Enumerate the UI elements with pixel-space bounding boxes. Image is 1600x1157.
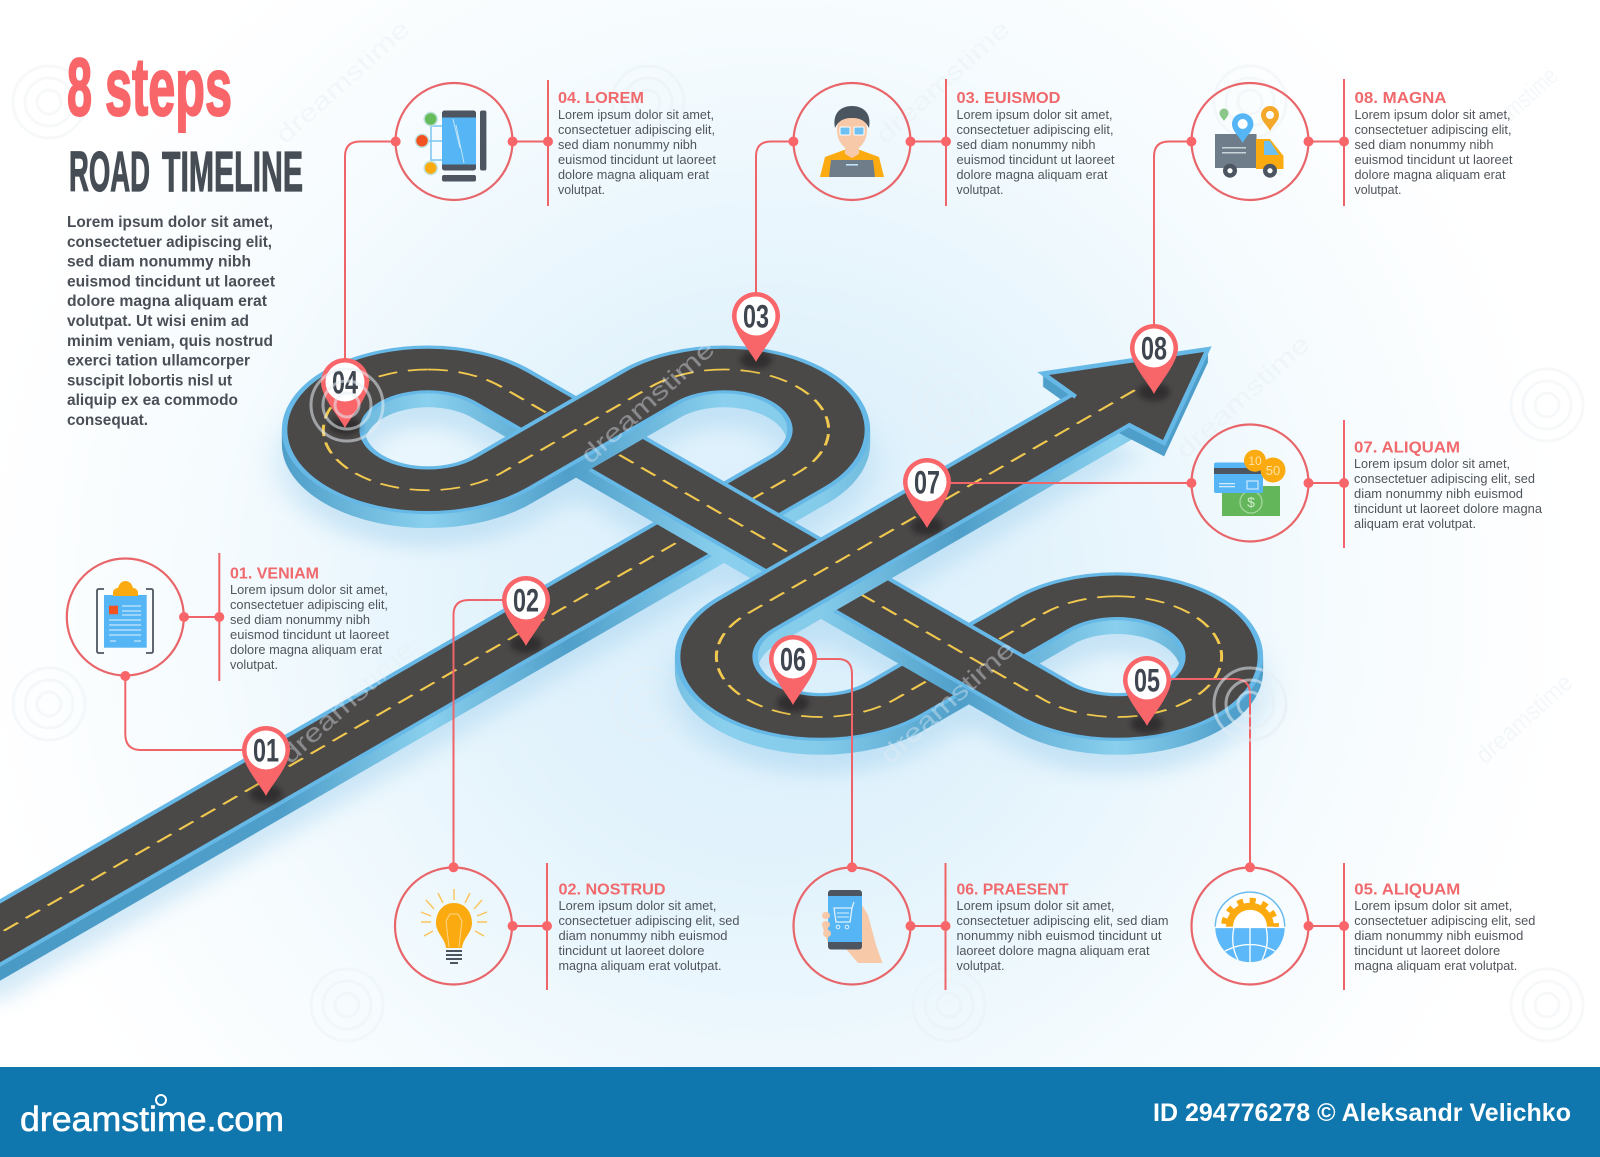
step heading: 04. LOREM	[558, 90, 644, 107]
step heading: 03. EUISMOD	[956, 90, 1060, 107]
pin 01	[242, 726, 290, 803]
step description: sed diam nonummy nibh	[558, 138, 697, 152]
intro paragraph: volutpat. Ut wisi enim ad	[67, 313, 249, 330]
watermark text: dreamstime	[1470, 62, 1563, 149]
step description: consectetuer adipiscing elit,	[1354, 123, 1512, 137]
pin 07	[903, 458, 951, 535]
step heading: 06. PRAESENT	[956, 882, 1069, 899]
callout 03 EUISMOD	[788, 79, 1115, 206]
heading: road timeline: ROAD	[69, 140, 150, 204]
step description: Lorem ipsum dolor sit amet,	[558, 899, 716, 913]
callout 08 MAGNA	[1186, 79, 1513, 206]
title: 8 steps	[67, 42, 232, 133]
step description: Lorem ipsum dolor sit amet,	[956, 899, 1114, 913]
step description	[956, 899, 1168, 973]
step description: sed diam nonummy nibh	[1354, 138, 1494, 152]
connector: pin 02 to callout	[454, 600, 505, 867]
step description: Lorem ipsum dolor sit amet,	[558, 108, 714, 122]
connector: pin 05 to callout	[1170, 679, 1250, 867]
watermark text: dreamstime	[270, 15, 415, 149]
callout 07 ALIQUAM	[1186, 420, 1542, 548]
intro paragraph: Lorem ipsum dolor sit amet,	[67, 214, 273, 231]
step description: euismod tincidunt ut laoreet	[558, 153, 717, 167]
watermark spirals over road	[311, 369, 1286, 740]
step description: tincidunt ut laoreet dolore	[558, 944, 705, 958]
intro paragraph	[67, 214, 276, 429]
pin 01: 01	[253, 732, 279, 768]
footer banner	[0, 1067, 1600, 1157]
step heading: 07. ALIQUAM	[1354, 440, 1460, 456]
pin 02: 02	[513, 582, 539, 618]
callout 06 PRAESENT	[794, 862, 1168, 990]
step description	[558, 899, 740, 973]
watermark text: dreamstime	[575, 335, 720, 469]
connector: pin 03 to callout	[756, 142, 793, 296]
step description: dolore magna aliquam erat	[558, 168, 710, 182]
title: 8 steps: steps	[105, 42, 232, 133]
step description: diam nonummy nibh euismod	[558, 929, 728, 943]
step description: dolore magna aliquam erat	[1354, 168, 1506, 182]
callout 02 NOSTRUD	[395, 862, 740, 990]
pin 08: 08	[1141, 330, 1167, 366]
step description: magna aliquam erat volutpat.	[1354, 959, 1517, 973]
intro paragraph: suscipit lobortis nisl ut	[67, 372, 233, 389]
intro paragraph: euismod tincidunt ut laoreet	[67, 273, 276, 290]
connector: pin 07 to callout	[950, 482, 1191, 484]
intro paragraph: consequat.	[67, 412, 148, 429]
step description: magna aliquam erat volutpat.	[558, 959, 722, 973]
road: final section with arrow head	[716, 352, 1204, 731]
step heading: 08. MAGNA	[1354, 90, 1447, 107]
callout 05 ALIQUAM	[1192, 862, 1535, 990]
intro paragraph: consectetuer adipiscing elit,	[67, 234, 272, 251]
watermark text: dreamstime	[1170, 330, 1315, 464]
icon: card and money	[1214, 450, 1286, 516]
step description: euismod tincidunt ut laoreet	[956, 153, 1115, 167]
banner logo: dreamstime.com	[20, 1100, 284, 1139]
step description: consectetuer adipiscing elit, sed diam	[956, 914, 1168, 928]
icon: clipboard	[97, 581, 153, 653]
icon: light bulb	[421, 889, 487, 963]
step description: Lorem ipsum dolor sit amet,	[956, 108, 1112, 122]
step description: volutpat.	[956, 959, 1004, 973]
pin 05	[1123, 656, 1171, 733]
step description: consectetuer adipiscing elit, sed	[1354, 472, 1535, 486]
step description: consectetuer adipiscing elit,	[230, 598, 388, 612]
watermark text: dreamstime	[875, 635, 1020, 769]
icon: card and money: 50	[1266, 463, 1280, 478]
icon: smartphone	[416, 110, 486, 182]
step heading: 01. VENIAM	[230, 565, 319, 582]
step description: Lorem ipsum dolor sit amet,	[1354, 899, 1512, 913]
step description: volutpat.	[1354, 183, 1402, 197]
road soft shadow	[0, 401, 1222, 988]
heading: road timeline: TIMELINE	[162, 140, 303, 204]
step description: euismod tincidunt ut laoreet	[230, 628, 390, 642]
step description: nonummy nibh euismod tincidunt ut	[956, 929, 1162, 943]
pin 07: 07	[914, 464, 940, 500]
intro paragraph: minim veniam, quis nostrud	[67, 333, 273, 350]
icon: card and money: $	[1247, 494, 1255, 510]
step description	[1354, 899, 1535, 973]
step heading: 02. NOSTRUD	[558, 882, 666, 899]
step description: Lorem ipsum dolor sit amet,	[1354, 108, 1510, 122]
step description: diam nonummy nibh euismod	[1354, 487, 1523, 501]
step description: diam nonummy nibh euismod	[1354, 929, 1523, 943]
watermark text	[270, 15, 1578, 769]
road: lower sections	[0, 369, 1117, 970]
pin 05: 05	[1134, 662, 1160, 698]
step description: laoreet dolore magna aliquam erat	[956, 944, 1150, 958]
callout 01 VENIAM	[67, 553, 390, 681]
watermark text: dreamstime	[870, 15, 1015, 149]
intro paragraph: dolore magna aliquam erat	[67, 293, 268, 310]
step description	[1354, 457, 1542, 531]
pin 04: 04	[332, 364, 358, 400]
title: 8 steps: 8	[67, 42, 92, 133]
connector: pin 04 to callout	[345, 142, 396, 362]
pin 06	[769, 635, 817, 712]
step description: Lorem ipsum dolor sit amet,	[1354, 457, 1510, 471]
pin 04	[321, 358, 369, 435]
step description: consectetuer adipiscing elit, sed	[558, 914, 740, 928]
pin 02	[502, 576, 550, 653]
step description: sed diam nonummy nibh	[956, 138, 1096, 152]
step description: tincidunt ut laoreet dolore	[1354, 944, 1500, 958]
step description: consectetuer adipiscing elit,	[558, 123, 715, 137]
step description	[1354, 108, 1513, 197]
step description	[956, 108, 1115, 197]
banner credit: ID 294776278 © Aleksandr Velichko	[1153, 1099, 1571, 1127]
watermark text: dreamstime	[275, 635, 420, 769]
road: upper left loop section	[323, 369, 724, 504]
step description: volutpat.	[956, 183, 1004, 197]
step heading: 05. ALIQUAM	[1354, 882, 1460, 899]
step description: Lorem ipsum dolor sit amet,	[230, 583, 388, 597]
step description: tincidunt ut laoreet dolore magna	[1354, 502, 1542, 516]
intro paragraph: sed diam nonummy nibh	[67, 254, 251, 271]
icon: delivery truck	[1215, 106, 1284, 178]
step description: consectetuer adipiscing elit,	[956, 123, 1114, 137]
watermark text: dreamstime	[1470, 668, 1578, 769]
icon: person with laptop	[820, 106, 884, 177]
step description: volutpat.	[558, 183, 605, 197]
callout 04 LOREM	[391, 80, 717, 206]
step description: dolore magna aliquam erat	[230, 643, 383, 657]
road: long diagonal section	[428, 369, 1222, 731]
step description: volutpat.	[230, 658, 278, 672]
step description	[558, 108, 717, 197]
connector: pin 08 to callout	[1154, 142, 1191, 329]
connector: pin 01 to callout	[125, 676, 245, 750]
pin 06: 06	[780, 642, 806, 678]
icon: phone in hand	[822, 890, 882, 963]
pin 08	[1130, 324, 1178, 401]
step description	[230, 583, 390, 672]
pin 03: 03	[743, 298, 769, 334]
icon: globe with gear	[1215, 892, 1285, 962]
step description: consectetuer adipiscing elit, sed	[1354, 914, 1535, 928]
step description: euismod tincidunt ut laoreet	[1354, 153, 1513, 167]
intro paragraph: exerci tation ullamcorper	[67, 353, 250, 370]
step description: dolore magna aliquam erat	[956, 168, 1108, 182]
icon: card and money: 10	[1248, 454, 1262, 468]
step description: sed diam nonummy nibh	[230, 613, 370, 627]
step description: aliquam erat volutpat.	[1354, 517, 1476, 531]
pin 03	[732, 292, 780, 369]
connector: pin 06 to callout	[815, 659, 852, 867]
intro paragraph: aliquip ex ea commodo	[67, 392, 238, 409]
